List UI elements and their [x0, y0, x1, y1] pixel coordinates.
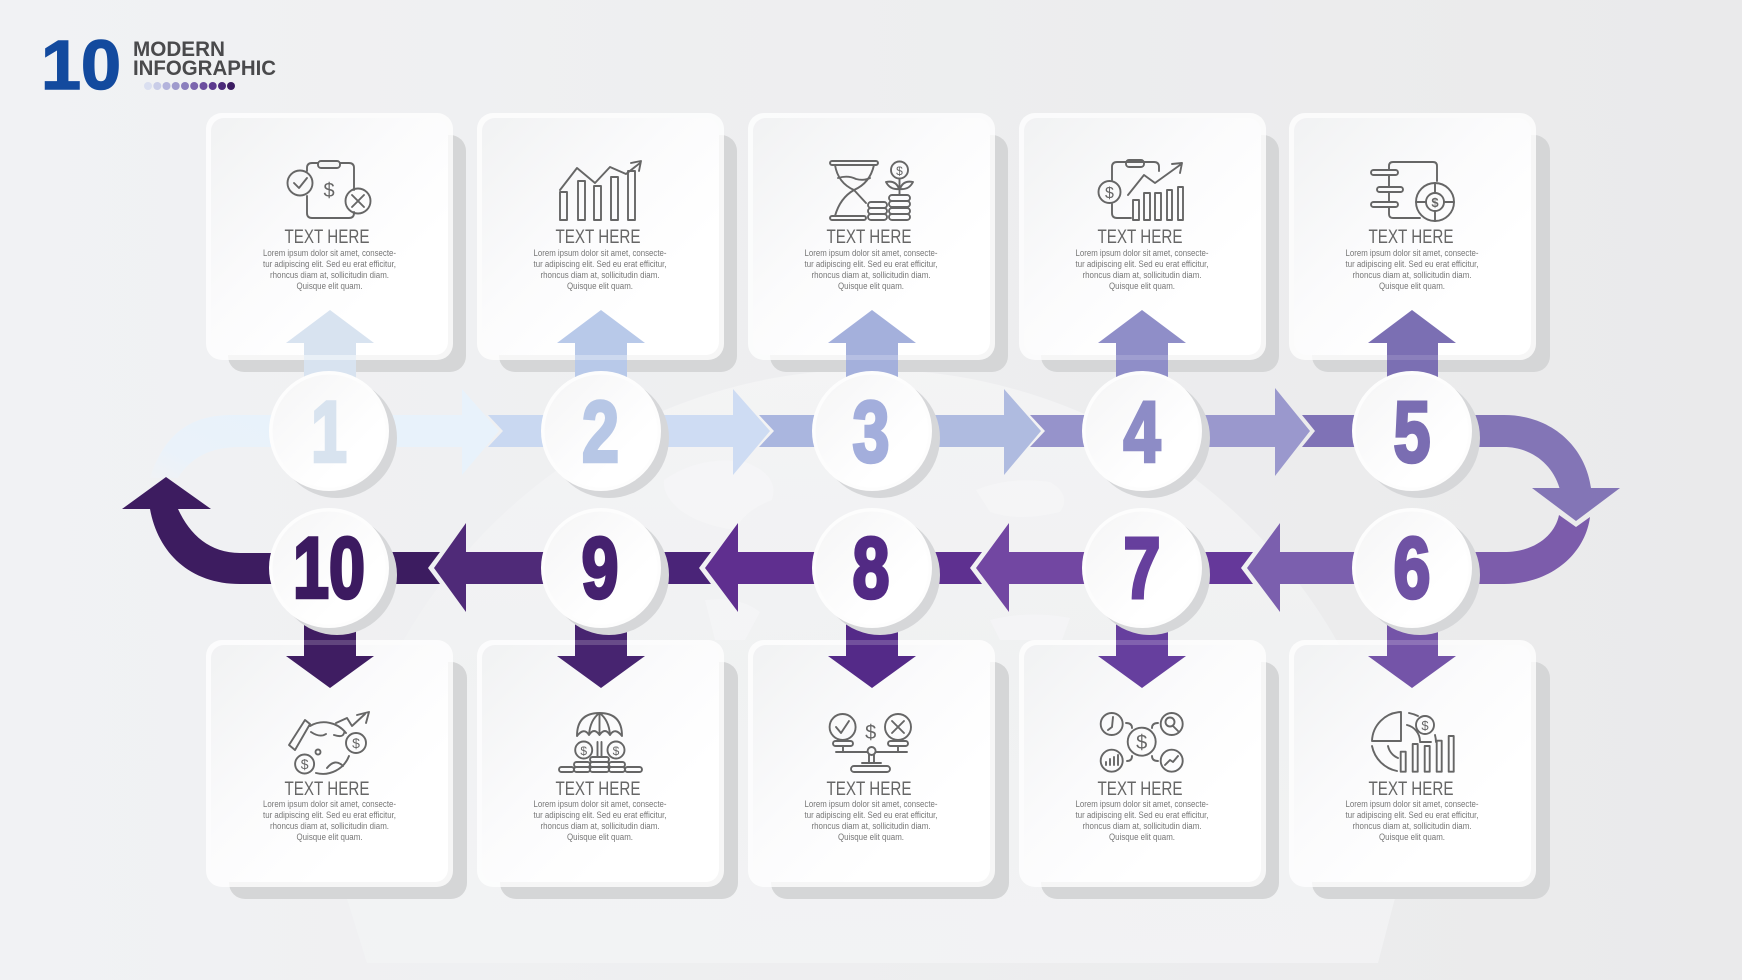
icon: globe with coins and growth arrow: $ [352, 735, 360, 751]
card 8 body text: Lorem ipsum dolor sit amet, consecte- [804, 799, 938, 809]
card 10 body text: rhoncus diam at, sollicitudin diam. [270, 821, 389, 831]
arrow: step 1 to 2 [380, 389, 499, 475]
arrow: up from step 5 [1368, 310, 1456, 395]
card 7 heading: TEXT HERE [1098, 778, 1182, 800]
card 9 body text: Lorem ipsum dolor sit amet, consecte- [534, 799, 667, 809]
badge: step 4: 4 [1124, 384, 1161, 480]
arrow: step 2 to 3 [650, 389, 770, 475]
badge: step 5 [1352, 371, 1480, 498]
card 3 body text: tur adipiscing elit. Sed eu erat efficitur, [804, 259, 938, 269]
badge: step 7 [1082, 508, 1210, 635]
arrow: up from step 1 [286, 310, 374, 395]
badge: step 6 [1352, 508, 1480, 635]
card 6 body text: tur adipiscing elit. Sed eu erat efficitur, [1346, 810, 1478, 820]
card 4 body text [1076, 248, 1209, 291]
card 3 heading: TEXT HERE [826, 226, 912, 248]
card 8 body text [804, 799, 938, 842]
badge: step 9 [541, 508, 669, 635]
badge: step 1 [269, 371, 397, 498]
card 8 body text: rhoncus diam at, sollicitudin diam. [812, 821, 930, 831]
card 1 body text: Quisque elit quam. [296, 281, 362, 291]
card 7 body text: rhoncus diam at, sollicitudin diam. [1082, 821, 1202, 831]
card 1 body text [263, 248, 396, 291]
card 5 body text [1346, 248, 1479, 291]
card 7 body text: tur adipiscing elit. Sed eu erat efficitur, [1076, 810, 1208, 820]
icon: clipboard with growth chart: $ [1105, 185, 1114, 202]
card 8 heading: TEXT HERE [826, 778, 912, 800]
badge: step 3 [812, 371, 940, 498]
icon: balance scale [830, 714, 911, 772]
card 1 body text: rhoncus diam at, sollicitudin diam. [270, 270, 389, 280]
card 7 body text: Lorem ipsum dolor sit amet, consecte- [1076, 799, 1209, 809]
card 5 body text: tur adipiscing elit. Sed eu erat efficitur, [1346, 259, 1478, 269]
badge: step 7: 7 [1124, 520, 1160, 616]
card 10 heading: TEXT HERE [284, 778, 370, 800]
badge: step 3: 3 [852, 384, 890, 480]
card 1 body text: tur adipiscing elit. Sed eu erat efficitur, [263, 259, 396, 269]
panel: card 2 [477, 113, 737, 372]
card 2 body text: rhoncus diam at, sollicitudin diam. [540, 270, 660, 280]
arrow: step 9 to 10 [434, 523, 560, 612]
icon: hourglass and coins [830, 161, 913, 220]
card 9 heading: TEXT HERE [556, 778, 640, 800]
icon: finance network: $ [1136, 732, 1147, 754]
logo number: 10 [41, 26, 121, 104]
arrow: curve from step 5 to 6 [1460, 415, 1620, 521]
icon: balance scale: $ [865, 722, 876, 744]
band: into step 3 [759, 415, 830, 447]
card 5 body text: Lorem ipsum dolor sit amet, consecte- [1346, 248, 1479, 258]
icon: clipboard with growth chart [1098, 160, 1183, 220]
arrow: step 7 to 8 [976, 523, 1100, 612]
badge: step 1: 1 [311, 384, 347, 480]
card 10 body text: tur adipiscing elit. Sed eu erat efficitur, [263, 810, 396, 820]
panel: card 3 [748, 113, 1008, 372]
card 10 body text: Lorem ipsum dolor sit amet, consecte- [263, 799, 396, 809]
background globe [335, 369, 1405, 963]
card 5 heading: TEXT HERE [1368, 226, 1454, 248]
band: into step 5 [1302, 415, 1370, 447]
card 3 body text: Lorem ipsum dolor sit amet, consecte- [804, 248, 938, 258]
card 3 body text: Quisque elit quam. [838, 281, 904, 291]
card 5 body text: rhoncus diam at, sollicitudin diam. [1352, 270, 1472, 280]
panel: card 1 [206, 113, 466, 372]
icon: finance network [1101, 713, 1183, 772]
arrow: step 6 to 7 [1247, 523, 1370, 612]
icon: document with target: $ [1431, 195, 1439, 210]
card 4 heading: TEXT HERE [1098, 226, 1182, 248]
arrow: up from step 2 [557, 310, 645, 395]
logo dots [144, 82, 235, 90]
panel: card 6 [1289, 640, 1550, 899]
icon: clipboard approve or reject [288, 161, 370, 218]
card 7 body text: Quisque elit quam. [1109, 832, 1175, 842]
card 2 body text: tur adipiscing elit. Sed eu erat efficitur, [534, 259, 666, 269]
icon: globe with coins and growth arrow: $ [301, 756, 309, 772]
arrow: down from step 8 [828, 600, 916, 688]
band: right of step 7 [1180, 552, 1253, 584]
badge: step 2 [541, 371, 669, 498]
card 3 body text: rhoncus diam at, sollicitudin diam. [812, 270, 930, 280]
icon: globe with coins and growth arrow [289, 712, 369, 774]
icon: umbrella over coins: $ [580, 744, 587, 758]
arrow: down from step 6 [1368, 600, 1456, 688]
panel: card 4 [1019, 113, 1279, 372]
card 9 body text: tur adipiscing elit. Sed eu erat efficitur, [534, 810, 666, 820]
card 2 body text: Lorem ipsum dolor sit amet, consecte- [534, 248, 667, 258]
icon: donut chart with bars: $ [1421, 718, 1429, 733]
badge: step 8 [812, 508, 940, 635]
band: right of step 9 [640, 552, 711, 584]
badge: step 4 [1082, 371, 1210, 498]
icon: donut chart with bars [1372, 712, 1454, 772]
card 1 heading: TEXT HERE [284, 226, 370, 248]
arrow: step 8 to 9 [705, 523, 830, 612]
band: right of step 10 [370, 552, 440, 584]
band: into step 2 [488, 415, 560, 447]
band: right of step 8 [910, 552, 982, 584]
card 6 body text: rhoncus diam at, sollicitudin diam. [1352, 821, 1472, 831]
panel: card 9 [477, 640, 738, 899]
badge: step 10: 10 [293, 520, 365, 616]
icon: clipboard approve or reject: $ [323, 180, 335, 202]
icon: umbrella over coins [559, 713, 642, 772]
card 2 body text [534, 248, 667, 291]
badge: step 8: 8 [852, 520, 890, 616]
card 6 heading: TEXT HERE [1368, 778, 1454, 800]
card 9 body text [534, 799, 667, 842]
card 10 body text: Quisque elit quam. [296, 832, 362, 842]
panel: card 10 [206, 640, 467, 899]
badge: step 2: 2 [582, 384, 619, 480]
panel: card 5 [1289, 113, 1550, 372]
band: into step 4 [1030, 415, 1100, 447]
logo title line 2: INFOGRAPHIC [133, 57, 276, 80]
badge: step 5: 5 [1394, 384, 1430, 480]
card 4 body text: tur adipiscing elit. Sed eu erat efficitur, [1076, 259, 1208, 269]
card 3 body text [804, 248, 938, 291]
icon: document with target [1371, 162, 1454, 221]
arrow: curve into step 1 [150, 415, 280, 478]
arrow: down from step 7 [1098, 600, 1186, 688]
panel: card 7 [1019, 640, 1279, 899]
card 4 body text: Lorem ipsum dolor sit amet, consecte- [1076, 248, 1209, 258]
arrow: curve out of step 10 [122, 477, 290, 584]
card 1 body text: Lorem ipsum dolor sit amet, consecte- [263, 248, 396, 258]
badge: step 6: 6 [1394, 520, 1430, 616]
card 6 body text: Lorem ipsum dolor sit amet, consecte- [1346, 799, 1479, 809]
arrow: up from step 3 [828, 310, 916, 395]
card 2 body text: Quisque elit quam. [567, 281, 633, 291]
badge: step 10 [269, 508, 397, 635]
arrow: down from step 10 [286, 600, 374, 688]
card 9 body text: rhoncus diam at, sollicitudin diam. [540, 821, 660, 831]
card 7 body text [1076, 799, 1209, 842]
arrow: down from step 9 [557, 600, 645, 688]
card 9 body text: Quisque elit quam. [567, 832, 633, 842]
card 8 body text: tur adipiscing elit. Sed eu erat efficitur, [804, 810, 938, 820]
card 6 body text: Quisque elit quam. [1379, 832, 1445, 842]
badge: step 9: 9 [582, 520, 618, 616]
icon: hourglass and coins: $ [896, 164, 903, 178]
arrow: step 3 to 4 [920, 389, 1041, 475]
card 4 body text: Quisque elit quam. [1109, 281, 1175, 291]
card 6 body text [1346, 799, 1479, 842]
band: curve out of step 6 [1460, 515, 1590, 584]
arrow: up from step 4 [1098, 310, 1186, 395]
logo title line 1: MODERN [133, 38, 225, 61]
card 5 body text: Quisque elit quam. [1379, 281, 1445, 291]
card 4 body text: rhoncus diam at, sollicitudin diam. [1082, 270, 1202, 280]
logo [41, 26, 276, 104]
card 8 body text: Quisque elit quam. [838, 832, 904, 842]
panel: card 8 [748, 640, 1009, 899]
icon: rising bar chart [560, 161, 641, 220]
card 2 heading: TEXT HERE [556, 226, 640, 248]
arrow: step 4 to 5 [1190, 388, 1310, 476]
card 10 body text [263, 799, 396, 842]
icon: umbrella over coins: $ [613, 744, 620, 758]
